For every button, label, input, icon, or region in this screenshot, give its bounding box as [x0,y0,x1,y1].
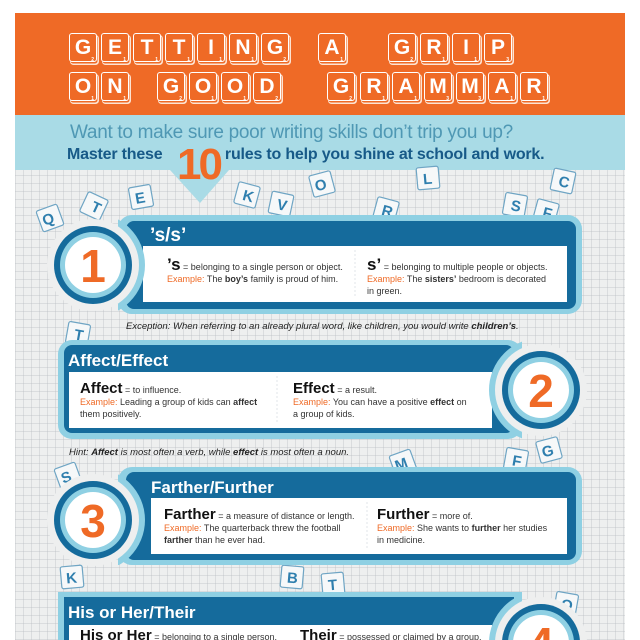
panel 1: 's/s' [41,213,582,317]
scattered tiles: B [286,570,299,587]
title tiles: A [494,75,510,98]
title tiles: 3 [478,96,481,102]
panel 1: 's/s': Example: The sisters’ bedroom is decorated [367,274,546,284]
title tiles: 1 [382,96,385,102]
scattered tiles: K [241,187,256,206]
title tiles: 1 [442,57,445,63]
title tiles: 3 [446,96,449,102]
title tiles: R [366,75,382,98]
scattered tiles: T [327,577,338,594]
title tiles: M [429,75,447,98]
hint note: Hint: Affect is most often a verb, while effect is most often a noun. [69,447,349,458]
right definition: Effect = a result. [293,380,377,397]
scattered tiles: V [275,196,289,215]
left definition: ’s = belonging to a single person or object. [167,255,343,274]
scattered tiles: F [511,452,523,471]
title tiles: 1 [510,96,513,102]
scattered tiles: T [73,326,85,345]
panel 4: His or Her/Their [58,592,522,640]
title tiles: 1 [219,57,222,63]
circle number 1: 1 [80,240,106,292]
scattered tiles: C [557,173,571,192]
title tiles: 2 [275,96,278,102]
title tiles: A [398,75,414,98]
heading: Farther/Further [151,478,274,497]
title tiles: 2 [410,57,413,63]
exception note: Exception: When referring to an already plural word, like children, you would write children’s. [126,321,519,332]
header band [15,13,625,115]
panel 3: Farther/Further: Example: The quarterback threw the football [164,523,340,533]
subtitle band [15,115,625,170]
title tiles: O [227,75,243,98]
panel 3: Farther/Further: in medicine. [377,535,425,545]
title tiles: 2 [283,57,286,63]
scattered tiles: L [422,171,433,188]
circle number 3: 3 [80,495,106,547]
scattered tiles: O [313,176,329,195]
title tiles: N [235,36,251,59]
panel 3: Farther/Further: farther than he ever had. [164,535,265,545]
title tiles: 1 [474,57,477,63]
left definition: Farther = a measure of distance or length. [164,506,355,523]
title tiles: 2 [349,96,352,102]
title tiles: I [208,36,214,59]
title tiles: A [324,36,340,59]
right definition: Further = more of. [377,506,473,523]
panel 3: Farther/Further [41,467,582,572]
title tiles: G [333,75,349,98]
scattered tiles: G [540,442,556,461]
title tiles: G [394,36,410,59]
title tiles: O [195,75,211,98]
scattered tiles: E [134,189,147,208]
title tiles [69,33,550,104]
circle number 4 [495,597,587,640]
title tiles: E [108,36,122,59]
title tiles: 3 [506,57,509,63]
title tiles: P [491,36,505,59]
big number 10: 10 [177,140,220,189]
title tiles: M [461,75,479,98]
scattered tiles: K [65,570,78,587]
title tiles: T [173,36,185,59]
title tiles: 1 [155,57,158,63]
panel 2: Affect/Effect [58,338,593,442]
title tiles: 2 [91,57,94,63]
scattered tiles: S [59,468,74,487]
subtitle line 2: Master these rules to help you shine at school and work. [67,146,544,163]
title tiles: 1 [91,96,94,102]
heading: ’s/s’ [150,225,186,246]
title tiles: G [163,75,179,98]
subtitle line 1: Want to make sure poor writing skills don’t trip you up? [70,122,513,143]
circle number 3 [54,481,132,559]
scattered tiles: R [380,202,395,221]
panel 2: Affect/Effect: a group of kids. [293,409,355,419]
title tiles: D [259,75,275,98]
left definition: Affect = to influence. [80,380,181,397]
title tiles: O [75,75,91,98]
scattered tiles: F [541,204,554,223]
title tiles: R [426,36,442,59]
title tiles: 2 [179,96,182,102]
grid background [15,170,625,640]
panel 2: Affect/Effect: them positively. [80,409,141,419]
title tiles: R [526,75,542,98]
title tiles: 1 [542,96,545,102]
panel 1: 's/s': in green. [367,286,402,296]
title tiles: 1 [211,96,214,102]
heading: His or Her/Their [68,603,196,622]
rules panels [47,215,587,640]
title tiles: 1 [123,57,126,63]
circle number 1 [54,226,132,304]
title tiles: 1 [187,57,190,63]
panel 1: 's/s': Example: The boy’s family is proud of him. [167,274,338,284]
title tiles: 1 [243,96,246,102]
scattered tiles: O [560,596,574,615]
title tiles: 1 [123,96,126,102]
right definition: s’ = belonging to multiple people or objects. [367,255,548,274]
title tiles: G [267,36,283,59]
title tiles: 1 [340,57,343,63]
title tiles: G [75,36,91,59]
scattered tiles: Q [40,210,57,230]
circle number 2: 2 [528,365,554,417]
scattered tiles: T [88,198,104,218]
scattered tiles: M [393,455,410,475]
circle number 2 [502,351,580,429]
title tiles: 1 [414,96,417,102]
panel 2: Affect/Effect: Example: Leading a group of kids can affect [80,397,257,407]
panel 3: Farther/Further: Example: She wants to further her studies [377,523,548,533]
title tiles: I [463,36,469,59]
panel 2: Affect/Effect: Example: You can have a positive effect on [293,397,467,407]
scattered tiles: S [509,197,522,216]
title tiles: N [107,75,123,98]
title tiles: T [141,36,153,59]
heading: Affect/Effect [68,351,168,370]
title tiles: 1 [251,57,254,63]
